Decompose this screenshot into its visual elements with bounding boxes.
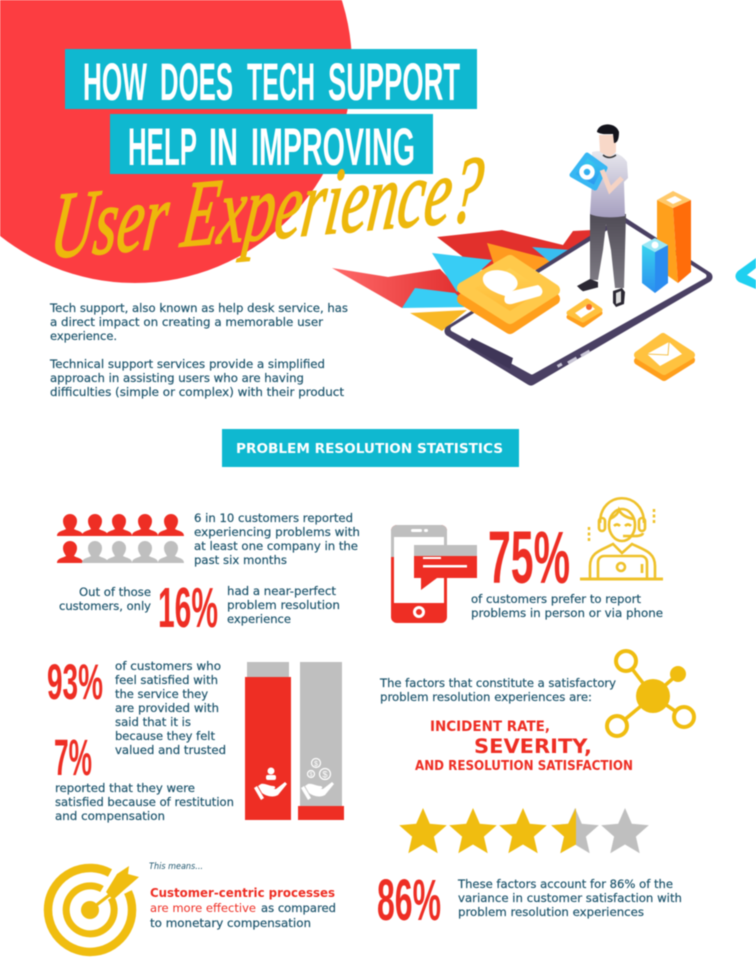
text: 6 in 10 customers: experiencing problems with [194, 525, 360, 539]
title banner [65, 49, 477, 177]
stat: 7%: reported that they were [55, 781, 195, 795]
intro text: Tech support, also known as help desk service, has [49, 301, 348, 315]
stat: 93%: said that it is [115, 715, 191, 729]
icon: hand with coins: $ [314, 761, 318, 768]
intro text: approach in assisting users who are having [50, 371, 304, 385]
conclusion text: as compared [261, 901, 336, 915]
conclusion text: This means... [149, 862, 203, 872]
bar: blue [642, 238, 668, 293]
stat: 93%: valued and trusted [115, 743, 226, 757]
illustration: phone and person [332, 124, 756, 380]
title banner: HELP [128, 118, 197, 177]
text: 6 in 10 customers: 6 in 10 customers reported [194, 511, 353, 525]
text: 6 in 10 customers: at least one company in the [194, 539, 358, 553]
star rating [399, 808, 649, 853]
tile: user [463, 261, 554, 328]
title script: User Experience: User Experience? [45, 135, 489, 279]
stat: 16%: had a near-perfect [227, 584, 336, 598]
stat: 16%: Out of those [79, 585, 151, 599]
icon: hand with coins: $ [309, 772, 313, 778]
intro text: Technical support services provide a simplified [49, 357, 325, 371]
title banner: IN [209, 118, 238, 177]
icon: hand with coins: $ [322, 770, 328, 780]
stat: 86% [377, 868, 682, 933]
factors list: INCIDENT RATE, [430, 719, 550, 735]
factors list: SEVERITY, [474, 735, 592, 758]
stat: 93% [47, 654, 226, 757]
title banner: HOW [83, 53, 147, 112]
conclusion text: Customer-centric processes [150, 885, 335, 900]
icon: target with arrow [48, 866, 139, 952]
stat: 93%: because they felt [115, 729, 215, 743]
conclusion text: are more effective [150, 901, 256, 915]
stat: 86%: problem resolution experiences [458, 905, 644, 919]
stat: 16%: experience [227, 612, 291, 626]
stat: 16% [59, 576, 340, 640]
text: 6 in 10 customers [194, 511, 360, 567]
title banner: IMPROVING [251, 118, 415, 177]
stat: 93%: are provided with [115, 701, 219, 715]
stat: 75%: 75% [488, 516, 570, 599]
tile: envelope [638, 337, 691, 377]
stat: 16%: customers, only [59, 599, 151, 613]
factors list [415, 719, 633, 774]
stat: 7%: satisfied because of restitution [55, 795, 234, 809]
intro text: difficulties (simple or complex) with their product [50, 385, 345, 399]
colourful shards [332, 230, 592, 331]
tile: toggle [569, 301, 600, 325]
tile: blue edge [735, 258, 756, 289]
stat: 86%: These factors account for 86% of the [457, 877, 673, 891]
intro text: a direct impact on creating a memorable user [50, 315, 323, 329]
title banner: DOES [160, 53, 233, 112]
stat: 93%: 93% [47, 654, 103, 710]
icon: people grid [57, 514, 184, 563]
text: 75% caption: problems in person or via phone [471, 606, 663, 620]
icon: hand with coins [301, 758, 334, 800]
stat: 16%: problem resolution [227, 598, 340, 612]
stat: 93%: feel satisfied with [115, 673, 218, 687]
section heading: PROBLEM RESOLUTION STATISTICS [236, 441, 503, 457]
user glyph [483, 270, 542, 304]
conclusion text [149, 862, 336, 930]
red circle background [0, 0, 352, 283]
icon: network nodes [607, 651, 694, 736]
text: factors intro: problem resolution experiences are: [380, 690, 592, 704]
icon: hand with person [254, 768, 287, 800]
title banner: SUPPORT [328, 53, 460, 112]
text: factors intro [379, 676, 616, 704]
factors list: AND RESOLUTION SATISFACTION [415, 759, 633, 774]
phone body [450, 222, 707, 380]
section heading [222, 429, 519, 467]
text: 6 in 10 customers: past six months [194, 553, 287, 567]
bar chart: 93 vs 7 [245, 662, 344, 820]
title banner: TECH [247, 53, 315, 112]
bar: orange [657, 191, 691, 283]
stat: 7%: and compensation [55, 809, 165, 823]
conclusion text: to monetary compensation [150, 916, 311, 930]
person [572, 124, 628, 307]
stat: 86%: 86% [377, 868, 441, 933]
intro text [49, 301, 348, 399]
stat: 7% [54, 729, 234, 823]
stat: 86%: variance in customer satisfaction with [458, 891, 682, 905]
text: factors intro: The factors that constitute a satisfactory [379, 676, 616, 690]
stat: 93%: the service they [115, 687, 208, 701]
icon: phone with message [391, 525, 477, 623]
icon: support agent [580, 498, 663, 579]
stat: 93%: of customers who [115, 659, 221, 673]
stat: 16%: 16% [158, 576, 218, 640]
text: 75% caption: of customers prefer to report [471, 592, 641, 606]
stat: 7%: 7% [54, 729, 92, 786]
text: 75% caption [471, 592, 663, 620]
intro text: experience. [50, 329, 117, 343]
